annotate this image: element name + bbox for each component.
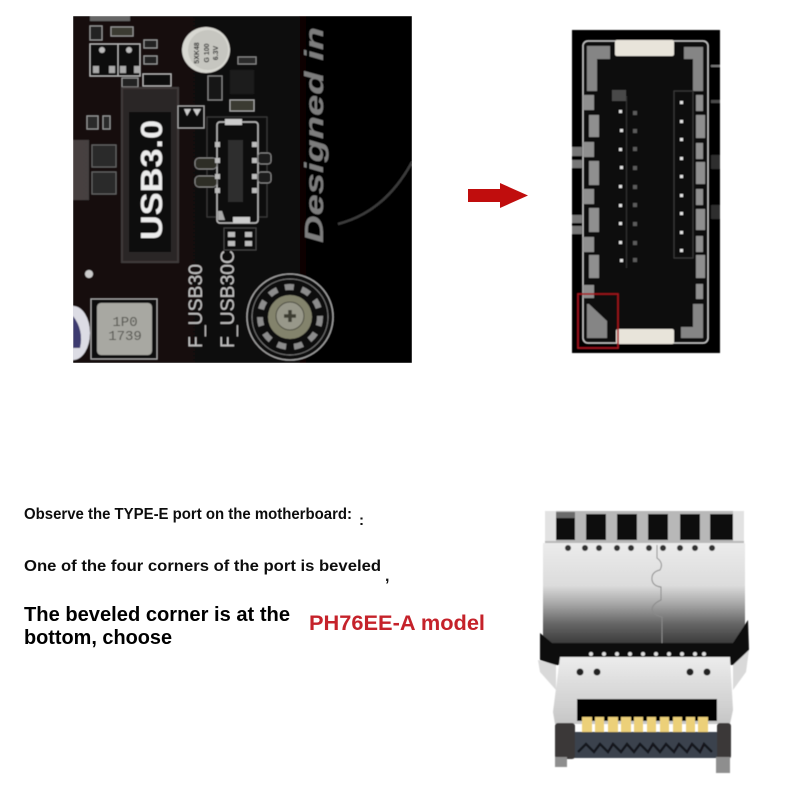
black band xyxy=(540,620,749,665)
text: model name: PH76EE-A model xyxy=(309,612,485,635)
solder notches xyxy=(565,545,715,551)
plastic base xyxy=(573,732,718,758)
side plastic legs xyxy=(555,723,731,759)
inductor: 1P0 xyxy=(112,315,138,331)
seam line xyxy=(652,545,662,643)
panel: motherboard photo xyxy=(56,16,412,363)
Designed in silk text: Designed in xyxy=(299,27,329,243)
text: observe port: Observe the TYPE-E port on the motherboard: xyxy=(24,506,352,523)
text: comma mark: , xyxy=(385,568,389,585)
text: bevel note: One of the four corners of the port is beveled xyxy=(24,558,381,575)
grey corner brackets xyxy=(587,46,703,338)
left pin column xyxy=(612,90,637,268)
capacitor xyxy=(182,27,230,73)
left side pads xyxy=(583,95,599,298)
F_USB30C label: F_USB30C xyxy=(218,250,239,348)
bevelled corner xyxy=(587,304,607,338)
shell dots xyxy=(589,652,706,656)
gold pins xyxy=(582,717,708,732)
right side pads xyxy=(696,95,705,299)
metal feet xyxy=(555,757,730,773)
side clips xyxy=(538,650,749,690)
port outline xyxy=(583,41,708,343)
text: colon mark: : xyxy=(359,512,364,529)
panel: connector product photo xyxy=(538,511,749,773)
type-E port on board xyxy=(195,117,271,223)
USB3.0 silk label: USB3.0 xyxy=(134,120,169,240)
top left components xyxy=(90,16,171,87)
text: choose instruction xyxy=(24,604,290,649)
shell holes xyxy=(576,668,710,676)
port slot xyxy=(577,699,717,721)
bevel highlight box xyxy=(578,294,618,348)
edge capacitor xyxy=(73,305,91,361)
right pin column xyxy=(674,91,693,258)
capacitor: G 100 xyxy=(204,43,211,63)
mounting screw xyxy=(247,274,333,360)
top teeth xyxy=(545,511,744,544)
USB3.0 connector xyxy=(122,88,178,262)
arrow xyxy=(468,183,528,208)
inductor: 1739 xyxy=(108,329,142,345)
metal body xyxy=(543,543,745,644)
capacitor: 5XK48 xyxy=(194,42,201,64)
front shell xyxy=(553,657,733,724)
text: choose instruction: The beveled corner is at the xyxy=(24,604,290,626)
outer pad marks xyxy=(572,65,720,234)
F_USB30 label: F_USB30 xyxy=(186,264,207,348)
capacitor: 6.3V xyxy=(213,45,220,60)
text: choose instruction: bottom, choose xyxy=(24,627,172,649)
small board chips xyxy=(73,57,256,278)
panel: type-E port close-up xyxy=(572,30,720,353)
latch tabs xyxy=(615,40,674,344)
base teeth xyxy=(578,744,712,752)
inductor xyxy=(91,299,157,359)
